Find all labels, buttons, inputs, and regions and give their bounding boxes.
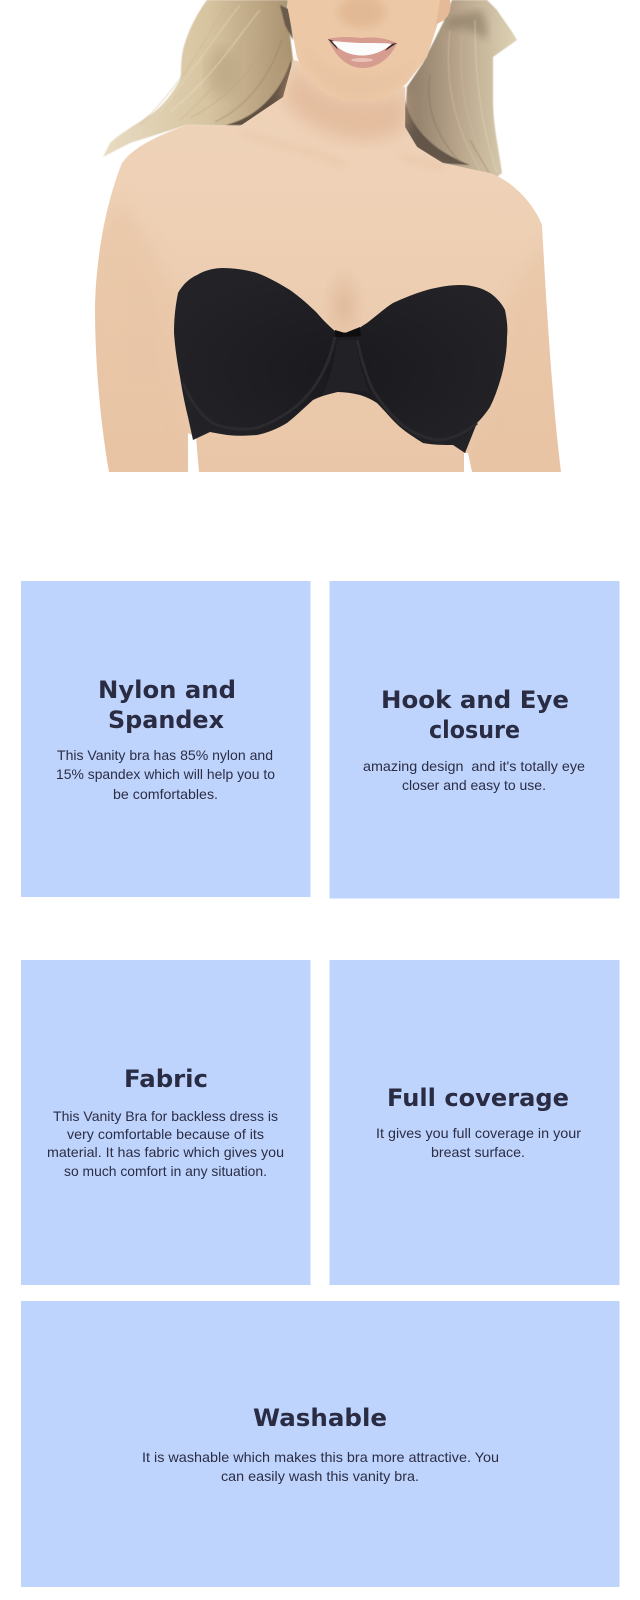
body text: full coverage [376,1125,581,1160]
bra [174,268,507,453]
skin: torso, arms, neck [95,60,561,472]
panel: hook and eye closure [330,581,620,898]
body text: full coverage: It gives you full coverage in your [376,1125,581,1141]
body text: nylon and spandex [56,747,275,802]
face [288,0,440,92]
body text: fabric: so much comfort in any situation. [64,1163,267,1179]
heading: full coverage: Full coverage [387,1084,569,1112]
teeth [332,41,392,56]
body text: fabric [47,1108,284,1179]
heading: nylon and spandex: Spandex [108,706,225,734]
centre panel [323,392,338,396]
panel: full coverage [330,960,620,1285]
nose shadow [338,0,386,28]
body text: fabric: material. It has fabric which gives you [47,1144,284,1160]
bra body [174,268,507,453]
neck and jaw shadow [283,57,405,140]
heading: hook and eye closure: closure [429,716,520,744]
body text: washable [142,1449,499,1484]
mouth corners [328,39,397,51]
panel: nylon and spandex [21,581,310,897]
arm shading [85,200,570,472]
heading: nylon and spandex [98,676,236,734]
heading: hook and eye closure: Hook and Eye [381,686,569,714]
heading: nylon and spandex: Nylon and [98,676,236,704]
body text: full coverage: breast surface. [431,1144,525,1160]
smile [328,37,397,68]
body text: washable: It is washable which makes this bra more attractive. You [142,1449,499,1465]
body text: fabric: This Vanity Bra for backless dress is [53,1108,278,1124]
lips [328,37,397,68]
heading: fabric: Fabric [124,1065,208,1093]
ear [436,0,450,24]
chin shading [300,40,420,100]
hair strands right [429,20,497,175]
hair strands left [140,5,282,125]
right underwire seam [357,340,477,440]
body text: nylon and spandex: be comfortables. [113,786,218,802]
body text: hook and eye closure: closer and easy to use. [402,777,546,793]
panel: fabric [21,960,310,1285]
body text: fabric: very comfortable because of its [67,1126,264,1142]
centre bow [335,327,361,337]
body text: hook and eye closure [363,758,585,793]
heading: washable: Washable [253,1404,387,1432]
hair: left side [103,0,293,157]
lip highlight [351,58,373,62]
body text: nylon and spandex: 15% spandex which will help you to [56,766,275,782]
hair: right side [405,0,517,177]
body text: washable: can easily wash this vanity bra. [221,1468,419,1484]
collarbone shading [240,132,445,168]
cleavage shadow [332,282,356,328]
body text: nylon and spandex: This Vanity bra has 85% nylon and [57,747,273,763]
body text: hook and eye closure: amazing design and it's totally eye [363,758,585,774]
product photo: model wearing black strapless bra [85,0,570,472]
panel: washable [21,1301,620,1587]
left underwire seam [183,337,335,429]
heading: hook and eye closure [381,686,569,744]
